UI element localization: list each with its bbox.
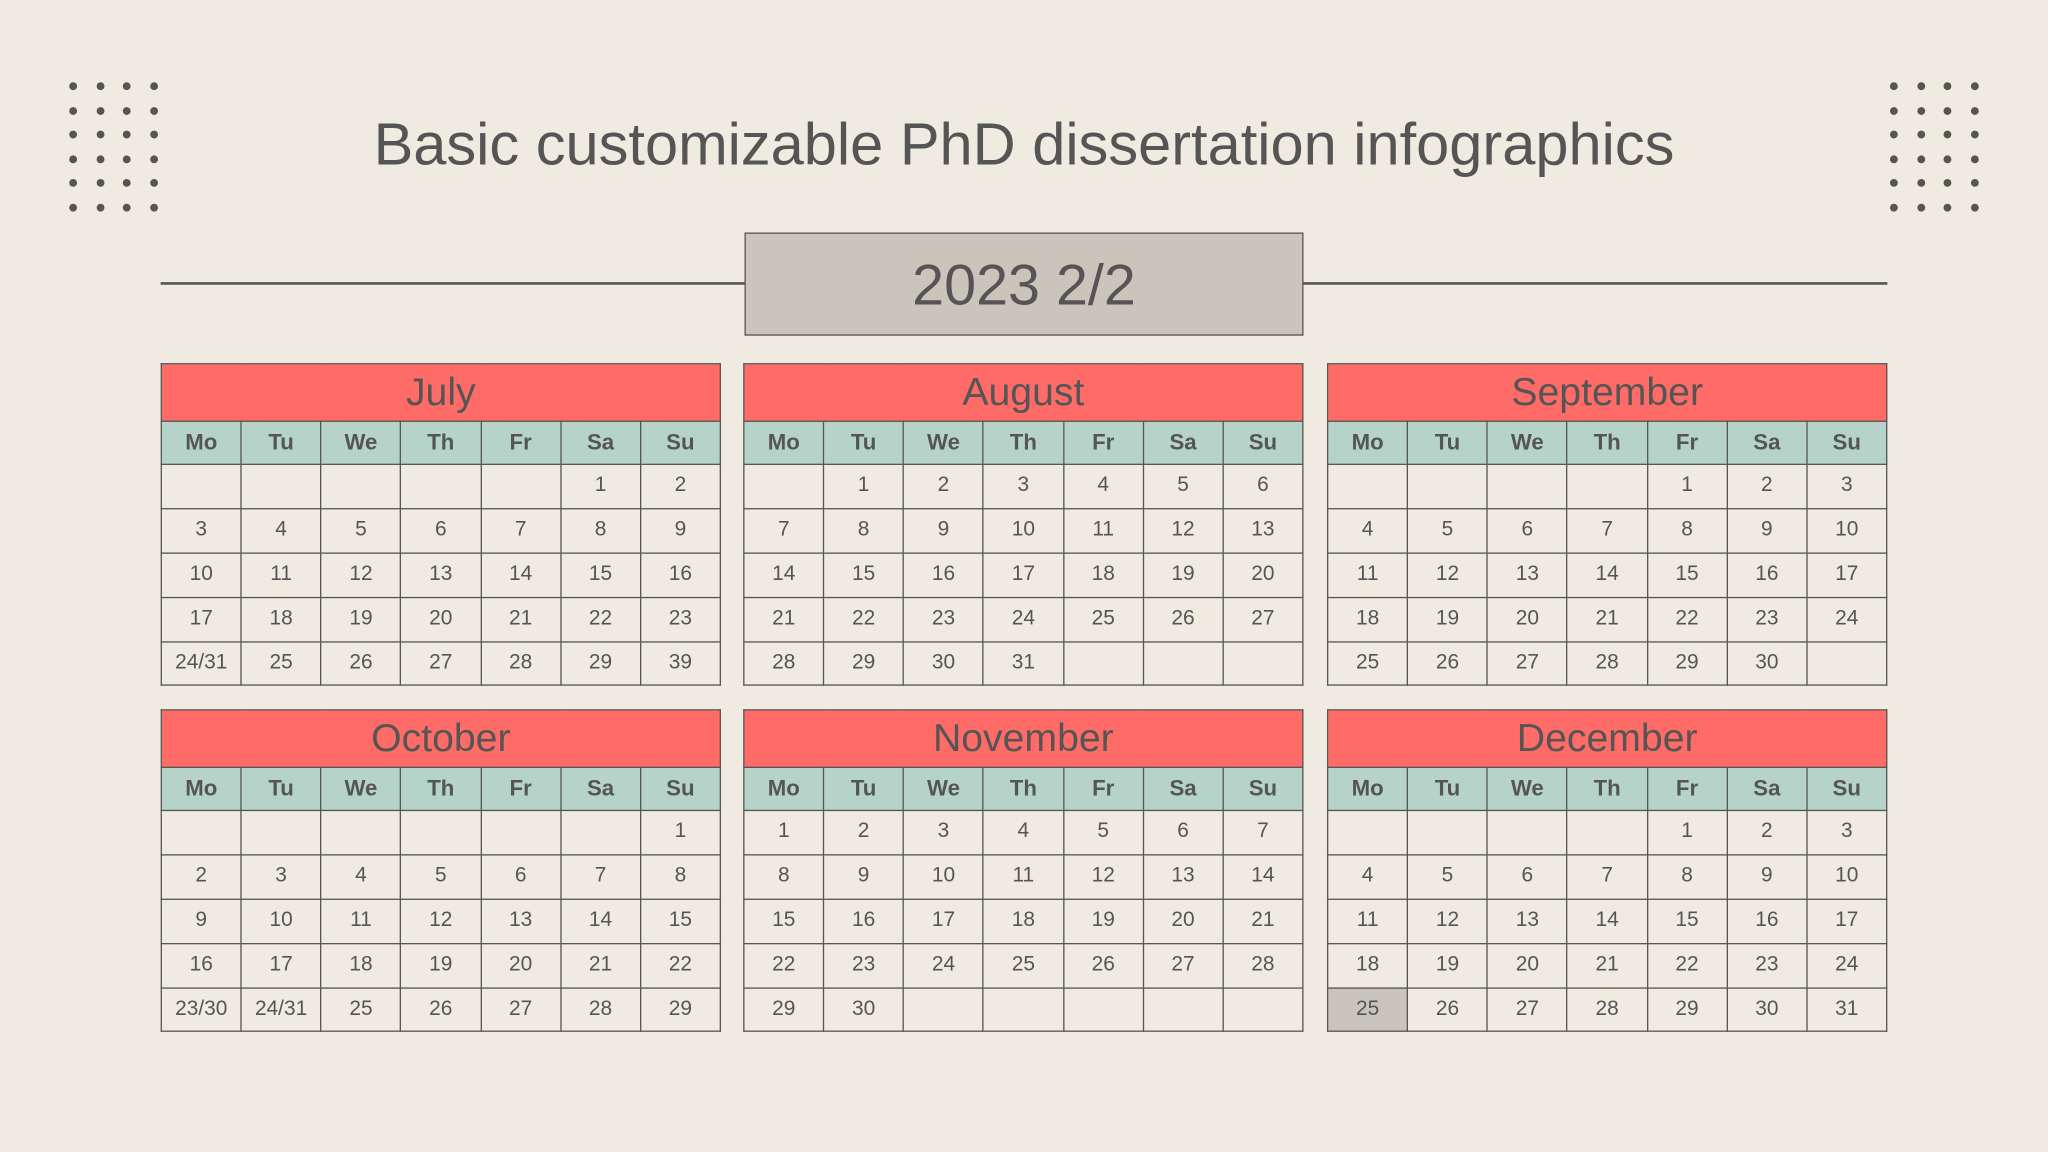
calendar: October: 16: [190, 954, 213, 976]
calendar: November: 7: [1257, 821, 1269, 843]
calendar: September: 2: [1761, 475, 1773, 497]
calendar: December: 1: [1681, 821, 1693, 843]
calendar: December: We: [1511, 776, 1544, 801]
calendar: August: 3: [1018, 475, 1029, 497]
calendar: December: Sa: [1753, 776, 1780, 801]
calendar: October: Mo: [185, 776, 217, 801]
calendar: September: 24: [1835, 607, 1858, 630]
calendar: December: 3: [1841, 821, 1853, 843]
calendar: November: Su: [1249, 776, 1277, 801]
calendar: August: 10: [1012, 519, 1035, 541]
calendar: October: Th: [427, 776, 454, 801]
calendar: September: 19: [1436, 607, 1459, 630]
calendar: July: Sa: [587, 430, 614, 455]
calendar: July: 19: [349, 607, 373, 630]
calendar: July: 18: [269, 607, 293, 630]
calendar: September: 6: [1521, 519, 1533, 541]
calendar: October: Sa: [587, 776, 614, 801]
calendar: September: Th: [1594, 430, 1621, 455]
calendar: November: 24: [932, 954, 955, 976]
calendar: July: Th: [427, 430, 454, 455]
calendar: December: 21: [1596, 954, 1619, 976]
calendar: November: 19: [1092, 909, 1115, 932]
calendar: July: 29: [589, 652, 612, 674]
calendar: July: 25: [269, 652, 293, 674]
calendar: November: 21: [1251, 909, 1275, 932]
calendar: August: 13: [1251, 519, 1275, 541]
calendar: July: 13: [429, 563, 452, 585]
calendar: July: 2: [675, 475, 686, 497]
calendar: September: 25: [1356, 652, 1379, 674]
calendar: October: 23/30: [175, 998, 227, 1020]
calendar: November: [743, 709, 1304, 1032]
calendar: August: 6: [1257, 475, 1269, 497]
calendar: October: 18: [349, 954, 373, 976]
calendar: July: 15: [589, 563, 612, 585]
calendar: December: December: [1517, 716, 1698, 760]
calendar: September: 3: [1841, 475, 1853, 497]
calendar: December: 2: [1761, 821, 1773, 843]
calendar: November: 23: [852, 954, 875, 976]
calendar: December: Mo: [1352, 776, 1384, 801]
calendar: July: Tu: [268, 430, 294, 455]
calendar: November: 5: [1097, 821, 1109, 843]
calendar: November: Th: [1010, 776, 1037, 801]
calendar: July: July: [406, 370, 476, 413]
calendar: September: 20: [1516, 607, 1539, 630]
calendar: September: 1: [1681, 475, 1693, 497]
calendar: August: 14: [772, 563, 795, 585]
calendar: December: 5: [1442, 865, 1453, 887]
calendar: November: 13: [1171, 865, 1195, 887]
calendar: August: 7: [778, 519, 790, 541]
calendar: December: 16: [1755, 909, 1779, 932]
calendar: July: 10: [190, 563, 213, 585]
calendar: December: 10: [1835, 865, 1858, 887]
calendar: August: Tu: [851, 430, 876, 455]
calendar: November: 2: [858, 821, 869, 843]
year label: [744, 232, 1304, 336]
calendar: September: Tu: [1435, 430, 1460, 455]
calendar: October: Fr: [510, 776, 532, 801]
calendar: December: 6: [1521, 865, 1533, 887]
calendar: November: 22: [772, 954, 795, 976]
calendar: August: Th: [1010, 430, 1037, 455]
calendar: October: 17: [269, 954, 293, 976]
calendar: December: 14: [1596, 909, 1619, 932]
calendar: December: 4: [1362, 865, 1373, 887]
calendar: November: 11: [1012, 865, 1034, 887]
calendar: December: 19: [1436, 954, 1459, 976]
calendar: July: 11: [270, 563, 292, 585]
calendar: July: 7: [515, 519, 526, 541]
calendar: December: 13: [1516, 909, 1539, 932]
calendar: July: [160, 363, 721, 686]
calendar: October: 22: [669, 954, 692, 976]
calendar: September: 14: [1596, 563, 1619, 585]
calendar: December: 12: [1436, 909, 1459, 932]
calendar: October: 15: [669, 909, 692, 932]
calendar: November: November: [933, 716, 1114, 760]
calendar: July: Su: [666, 430, 695, 455]
calendar: July: 27: [429, 652, 452, 674]
calendar: October: 10: [269, 909, 293, 932]
calendar: December: Th: [1594, 776, 1621, 801]
calendar: August: 17: [1012, 563, 1035, 585]
calendar: September: 15: [1675, 563, 1699, 585]
calendar: August: 18: [1092, 563, 1115, 585]
calendar: October: Su: [666, 776, 695, 801]
calendar: August: 4: [1097, 475, 1109, 497]
calendar: October: Tu: [268, 776, 294, 801]
decorative dots right: [1890, 82, 1979, 212]
calendar: November: 27: [1171, 954, 1195, 976]
calendar: September: 12: [1436, 563, 1459, 585]
calendar: October: 14: [589, 909, 612, 932]
calendar: August: 2: [938, 475, 949, 497]
calendar: November: Tu: [851, 776, 876, 801]
calendar: August: 21: [772, 607, 795, 630]
calendar: December: Fr: [1676, 776, 1698, 801]
calendar: December: 26: [1436, 998, 1459, 1020]
decorative dots left: [69, 82, 158, 212]
calendar: December: 17: [1835, 909, 1858, 932]
calendar: October: 19: [429, 954, 452, 976]
calendar: October: 20: [509, 954, 532, 976]
calendar: November: 17: [932, 909, 955, 932]
title: Basic customizable PhD dissertation infographics: [374, 111, 1674, 178]
calendar: October: 24/31: [255, 998, 307, 1020]
calendar: September: 27: [1516, 652, 1539, 674]
calendar: August: 26: [1171, 607, 1195, 630]
calendar: August: 24: [1012, 607, 1035, 630]
calendar: November: 1: [778, 821, 790, 843]
calendar: October: 25: [349, 998, 373, 1020]
calendar: September: 18: [1356, 607, 1379, 630]
calendar: November: 3: [938, 821, 949, 843]
calendar: October: 26: [429, 998, 452, 1020]
calendar: September: Su: [1833, 430, 1861, 455]
calendar: July: 8: [595, 519, 606, 541]
calendar: September: 11: [1357, 563, 1378, 585]
calendar: July: 4: [275, 519, 287, 541]
calendar: August: 20: [1251, 563, 1275, 585]
calendar: September: We: [1511, 430, 1544, 455]
calendar: October: October: [371, 716, 511, 760]
calendar: September: 5: [1442, 519, 1453, 541]
calendar: October: 1: [675, 821, 686, 843]
calendar: September: 9: [1761, 519, 1773, 541]
calendar: December: 7: [1601, 865, 1613, 887]
calendar: December: 8: [1681, 865, 1693, 887]
calendar: September: 21: [1596, 607, 1619, 630]
calendar: September: 30: [1755, 652, 1779, 674]
calendar: November: 28: [1251, 954, 1275, 976]
calendar: September: 29: [1675, 652, 1699, 674]
calendar: October: 4: [355, 865, 367, 887]
calendar: August: Su: [1249, 430, 1277, 455]
calendar: July: 14: [509, 563, 532, 585]
calendar: July: 28: [509, 652, 532, 674]
calendar: September: Sa: [1753, 430, 1780, 455]
calendar: October: 13: [509, 909, 532, 932]
calendar: November: 12: [1092, 865, 1115, 887]
calendar: November: 8: [778, 865, 790, 887]
calendar: November: 26: [1092, 954, 1115, 976]
calendar: August: We: [927, 430, 960, 455]
calendar: October: 21: [589, 954, 612, 976]
calendar: August: 29: [852, 652, 875, 674]
calendar: October: 29: [669, 998, 692, 1020]
calendar: November: Sa: [1169, 776, 1197, 801]
calendar: August: 23: [932, 607, 955, 630]
calendar: July: 39: [669, 652, 692, 674]
year label: 2023 2/2: [912, 253, 1136, 317]
calendar: August: 16: [932, 563, 955, 585]
calendar: November: Fr: [1092, 776, 1114, 801]
calendar: September: 28: [1596, 652, 1619, 674]
calendar: December: 20: [1516, 954, 1539, 976]
calendar: July: 22: [589, 607, 612, 630]
calendar: September: 4: [1362, 519, 1373, 541]
calendar: July: 6: [435, 519, 447, 541]
calendar: July: 24/31: [175, 652, 227, 674]
calendar: August: 19: [1171, 563, 1195, 585]
calendar: August: 8: [858, 519, 869, 541]
calendar: December: 30: [1755, 998, 1779, 1020]
calendar: August: 12: [1171, 519, 1195, 541]
calendar: August: 25: [1092, 607, 1115, 630]
calendar: September: Mo: [1352, 430, 1384, 455]
calendar: July: 1: [595, 475, 606, 497]
calendar: September: [1327, 363, 1888, 686]
calendar: September: 17: [1835, 563, 1858, 585]
calendar: July: 26: [349, 652, 373, 674]
calendar: August: 28: [772, 652, 795, 674]
calendar: November: 15: [772, 909, 795, 932]
calendar: August: 9: [938, 519, 949, 541]
calendar: July: Mo: [185, 430, 217, 455]
calendar: October: 11: [350, 909, 372, 932]
calendar: August: 30: [932, 652, 955, 674]
calendar: October: 8: [675, 865, 686, 887]
calendar: December: 24: [1835, 954, 1858, 976]
calendar: December: 18: [1356, 954, 1379, 976]
calendar: November: 16: [852, 909, 875, 932]
calendar: October: 28: [589, 998, 612, 1020]
calendar: October: 27: [509, 998, 532, 1020]
calendar: December: 29: [1675, 998, 1699, 1020]
calendar: July: 3: [195, 519, 207, 541]
calendar: December: 23: [1755, 954, 1779, 976]
calendar: December: 27: [1516, 998, 1539, 1020]
calendar: November: 9: [858, 865, 869, 887]
calendar: July: 12: [349, 563, 373, 585]
calendar: July: 9: [675, 519, 686, 541]
calendar: July: 20: [429, 607, 452, 630]
calendar: October: 6: [515, 865, 526, 887]
calendar: August: Fr: [1092, 430, 1114, 455]
calendar: November: We: [927, 776, 960, 801]
calendar: August: 22: [852, 607, 875, 630]
calendar: November: 20: [1171, 909, 1195, 932]
calendar: December: 9: [1761, 865, 1773, 887]
calendar: October: 9: [195, 909, 207, 932]
calendar: July: 23: [669, 607, 692, 630]
calendar: November: 4: [1018, 821, 1029, 843]
calendar: September: 7: [1601, 519, 1613, 541]
calendar: September: 22: [1675, 607, 1699, 630]
calendar: August: 27: [1251, 607, 1275, 630]
calendar: August: [743, 363, 1304, 686]
calendar: December: 15: [1675, 909, 1699, 932]
calendar: July: 5: [355, 519, 367, 541]
calendar: October: We: [344, 776, 377, 801]
calendar: July: 21: [509, 607, 532, 630]
calendar: August: 11: [1092, 519, 1114, 541]
calendar: July: 17: [190, 607, 213, 630]
calendar: October: 5: [435, 865, 447, 887]
calendar: November: 10: [932, 865, 955, 887]
calendar: October: [160, 709, 721, 1032]
calendar: September: 13: [1516, 563, 1539, 585]
calendar: September: 10: [1835, 519, 1858, 541]
calendar: August: 5: [1177, 475, 1189, 497]
calendar: September: 8: [1681, 519, 1693, 541]
calendar: August: 31: [1012, 652, 1035, 674]
calendar: August: Mo: [768, 430, 800, 455]
calendar: October: 7: [595, 865, 606, 887]
calendar: November: 6: [1177, 821, 1189, 843]
calendar: October: 2: [195, 865, 207, 887]
calendar: September: 16: [1755, 563, 1779, 585]
calendar: December: 11: [1357, 909, 1378, 932]
calendar: November: 29: [772, 998, 795, 1020]
calendar: November: 25: [1012, 954, 1035, 976]
calendar: July: 16: [669, 563, 692, 585]
calendar: August: August: [962, 370, 1084, 413]
calendar: December: 22: [1675, 954, 1699, 976]
calendar: August: Sa: [1169, 430, 1197, 455]
calendar: December: Tu: [1435, 776, 1460, 801]
calendar: November: 18: [1012, 909, 1035, 932]
calendar: August: 1: [858, 475, 869, 497]
calendar: November: Mo: [768, 776, 800, 801]
calendar: September: 26: [1436, 652, 1459, 674]
calendar: October: 12: [429, 909, 452, 932]
calendar: September: Fr: [1676, 430, 1698, 455]
calendar: December: 31: [1835, 998, 1858, 1020]
calendar: September: September: [1511, 370, 1703, 413]
calendar: December: [1327, 709, 1888, 1032]
calendar: December: Su: [1833, 776, 1861, 801]
calendar: September: 23: [1755, 607, 1779, 630]
calendar: November: 30: [852, 998, 875, 1020]
calendar: July: Fr: [510, 430, 532, 455]
calendar: December: 28: [1596, 998, 1619, 1020]
calendar: August: 15: [852, 563, 875, 585]
calendar: October: 3: [275, 865, 287, 887]
calendar: December: 25: [1356, 998, 1379, 1020]
calendar: November: 14: [1251, 865, 1275, 887]
calendar: July: We: [344, 430, 377, 455]
